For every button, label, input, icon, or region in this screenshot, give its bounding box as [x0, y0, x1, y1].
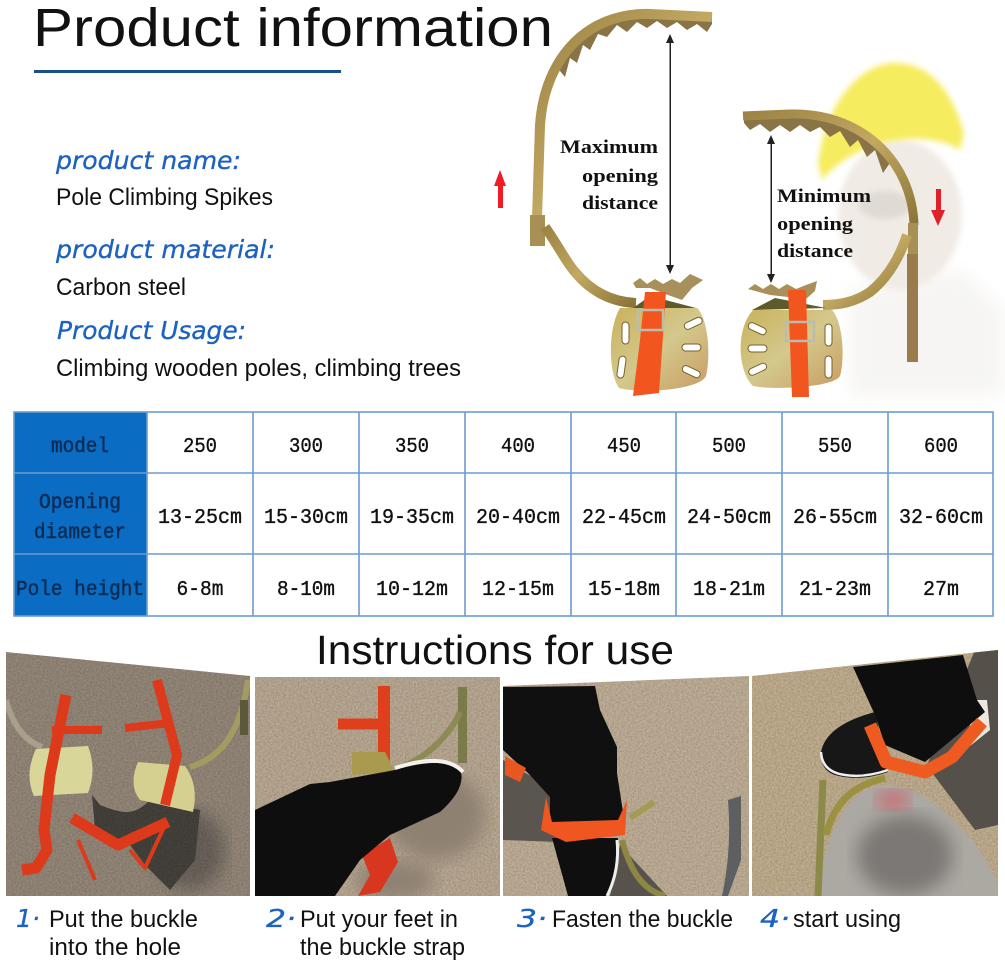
- hook teeth: [744, 116, 892, 173]
- foot plate: [611, 308, 708, 391]
- row: model: 600: [924, 436, 958, 459]
- curved tube: [622, 840, 665, 896]
- rod and tube: [818, 780, 823, 896]
- photo 3: fastening the buckle: [503, 676, 749, 896]
- step 2 caption: the buckle strap: [300, 934, 465, 961]
- step 2 caption: 2·: [266, 904, 296, 933]
- row: opening diameter: 26-55cm: [793, 507, 877, 530]
- icon: red down arrow: [931, 189, 945, 226]
- product name heading: product name:: [55, 146, 241, 175]
- label: maximum opening distance: distance: [582, 193, 658, 214]
- row: opening diameter: 20-40cm: [476, 507, 560, 530]
- label: minimum opening distance: [777, 186, 871, 262]
- shoe: [821, 712, 888, 778]
- row: pole height: 10-12m: [376, 579, 448, 602]
- upper hook tube: [537, 14, 712, 218]
- product usage heading: Product Usage:: [57, 316, 246, 345]
- title underline: [34, 70, 341, 73]
- label: maximum opening distance: [560, 137, 659, 214]
- row: opening diameter: [34, 492, 983, 545]
- orange straps: [870, 722, 982, 772]
- row: model: model: [51, 436, 109, 459]
- foot plate: [741, 310, 843, 388]
- row: pole height: 15-18m: [588, 579, 660, 602]
- step 2 caption: [266, 904, 465, 961]
- product name value: Pole Climbing Spikes: [56, 184, 273, 211]
- row: model: 250: [183, 436, 217, 459]
- arrow: maximum opening distance: [666, 34, 674, 274]
- step 2 caption: Put your feet in: [300, 906, 458, 933]
- right climbing spike: minimum opening: [741, 114, 918, 397]
- upper gripper teeth: [633, 274, 703, 300]
- upper hook tube: [743, 114, 914, 225]
- dark wedge above plate: [633, 296, 696, 308]
- row: model: 400: [501, 436, 535, 459]
- shoe: [552, 838, 618, 896]
- strap buckle: [638, 310, 663, 330]
- label: minimum opening distance: Minimum: [777, 186, 871, 207]
- photo 4: standing on a pole: [752, 650, 998, 896]
- collar: [908, 223, 918, 255]
- row: opening diameter: 32-60cm: [899, 507, 983, 530]
- icon: red up arrow: [494, 170, 506, 208]
- lower tube: [823, 235, 907, 305]
- wall shadow: [722, 796, 741, 896]
- row: pole height: Pole height: [16, 579, 144, 602]
- strap buckle: [786, 322, 814, 341]
- row: pole height: 6-8m: [176, 579, 224, 602]
- step 4 caption: 4·: [760, 904, 790, 933]
- plate slots: [616, 316, 703, 379]
- row: opening diameter: 22-45cm: [582, 507, 666, 530]
- leg: [853, 655, 985, 762]
- label: maximum opening distance: opening: [582, 166, 659, 187]
- label: minimum opening distance: distance: [777, 241, 853, 262]
- row: pole height: 27m: [923, 579, 959, 602]
- label: minimum opening distance: opening: [777, 214, 854, 235]
- red strap: [338, 686, 388, 772]
- pole: [817, 785, 998, 896]
- red straps: [22, 680, 177, 880]
- row: pole height: 18-21m: [693, 579, 765, 602]
- row: pole height: 8-10m: [277, 579, 335, 602]
- step 1 caption: into the hole: [49, 934, 181, 961]
- row: opening diameter: 15-30cm: [264, 507, 348, 530]
- row: opening diameter: 13-25cm: [158, 507, 242, 530]
- specification table: [14, 412, 993, 616]
- product material value: Carbon steel: [56, 274, 186, 301]
- table grid: [14, 412, 993, 616]
- orange straps: [505, 756, 526, 782]
- row: opening diameter: 19-35cm: [370, 507, 454, 530]
- sliding rod: [907, 254, 918, 362]
- row: model: 500: [712, 436, 746, 459]
- step 1 caption: 1·: [16, 904, 40, 933]
- product details text block: [55, 146, 461, 382]
- leg and shoe: [255, 763, 462, 896]
- row: model: 550: [818, 436, 852, 459]
- row: model: [51, 436, 958, 459]
- row: pole height: 21-23m: [799, 579, 871, 602]
- step 1 caption: Put the buckle: [49, 906, 198, 933]
- upper gripper teeth: [748, 281, 817, 299]
- photo 2: foot placed in strap: [255, 677, 500, 900]
- background worker with helmet: [818, 63, 1003, 395]
- row: model: 350: [395, 436, 429, 459]
- tubes: [6, 700, 42, 747]
- dark wedge above plate: [752, 298, 826, 310]
- row: opening diameter: diameter: [34, 522, 126, 545]
- row: opening diameter: 24-50cm: [687, 507, 771, 530]
- row: model: 450: [607, 436, 641, 459]
- step 3 caption: 3·: [517, 904, 547, 933]
- leg: [503, 686, 625, 825]
- product usage value: Climbing wooden poles, climbing trees: [56, 355, 461, 382]
- photo 1: spikes laid on the ground: [6, 650, 251, 897]
- row: model: 300: [289, 436, 323, 459]
- plates: [29, 746, 93, 796]
- arrow: minimum opening distance: [767, 135, 775, 283]
- step 4 caption: start using: [793, 906, 901, 933]
- collar: [530, 215, 545, 246]
- lower tube: [545, 227, 636, 303]
- orange strap: [788, 290, 809, 397]
- label: maximum opening distance: Maximum: [560, 137, 658, 158]
- hook teeth: [555, 15, 712, 77]
- product material heading: product material:: [55, 235, 275, 264]
- orange strap: [633, 292, 666, 396]
- left climbing spike: maximum opening: [530, 14, 712, 396]
- row: pole height: [16, 579, 959, 602]
- row: pole height: 12-15m: [482, 579, 554, 602]
- plate slots: [747, 321, 832, 378]
- step 3 caption: Fasten the buckle: [552, 906, 733, 933]
- row: opening diameter: Opening: [39, 492, 121, 515]
- instructions heading: Instructions for use: [316, 627, 674, 673]
- table header column: [14, 412, 147, 616]
- rod and tube: [458, 687, 467, 763]
- step 1 caption: [16, 904, 198, 961]
